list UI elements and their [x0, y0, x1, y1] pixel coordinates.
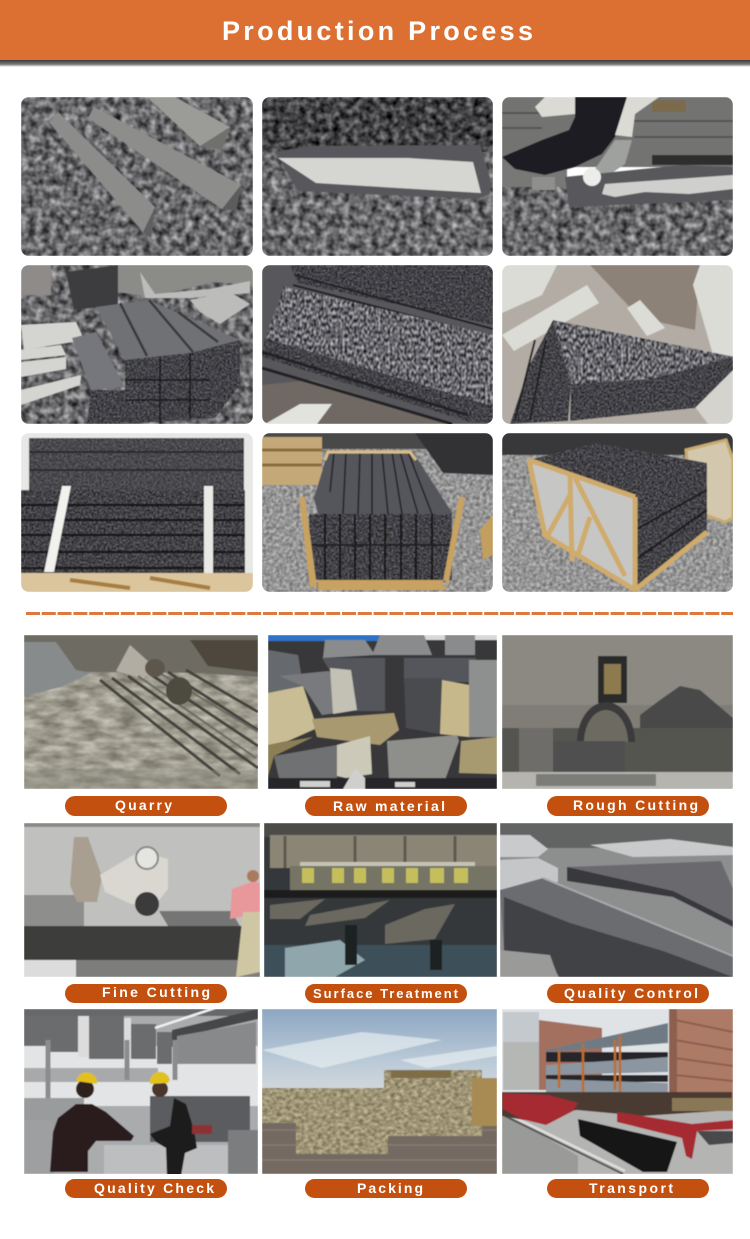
- photo: quality control slabs: [500, 823, 733, 977]
- pill: quarry: [65, 796, 227, 816]
- pill: quality control: Quality Control: [564, 985, 698, 1001]
- photo: worker flaming a kerbstone: [502, 97, 733, 256]
- photo: rough cutting saw: [502, 635, 733, 789]
- pill: transport: Transport: [589, 1180, 673, 1196]
- panel: process steps grid: [24, 635, 733, 1198]
- photo: kerbstones packed in crate, top view: [21, 433, 253, 592]
- pill: raw material: Raw material: [333, 798, 445, 814]
- photo: rail transport of slabs: [502, 1009, 733, 1174]
- title: Production Process: [222, 16, 533, 46]
- photo: kerbstone with flamed surface: [262, 97, 493, 256]
- photo: raw material blocks: [268, 635, 497, 789]
- pill: fine cutting: Fine Cutting: [102, 984, 210, 1000]
- photo: single block with pecked face: [502, 265, 735, 424]
- header banner: [0, 0, 750, 67]
- dashed divider: [26, 612, 733, 615]
- photo: packed crates under sky: [262, 1009, 497, 1174]
- pill: packing: Packing: [357, 1180, 423, 1196]
- photo: front of packed crate: [262, 433, 493, 592]
- photo: surface treatment line: [264, 823, 497, 977]
- pill: fine cutting: [65, 984, 227, 1003]
- pill: packing: [305, 1179, 467, 1198]
- photo: quarry: [24, 635, 258, 789]
- pill: transport: [547, 1179, 709, 1198]
- pill: quality check: Quality Check: [94, 1180, 214, 1196]
- photo: quality check workers: [24, 1003, 258, 1176]
- pill: quality check: [65, 1179, 227, 1198]
- photo: fine cutting machine: [24, 823, 260, 977]
- pill: surface treatment: Surface Treatment: [313, 986, 459, 1001]
- pill: rough cutting: Rough Cutting: [573, 797, 698, 813]
- pill: raw material: [305, 796, 467, 816]
- panel: upper photo grid: [21, 97, 735, 592]
- photo: sawn kerbstones on slate chips: [21, 97, 253, 256]
- photo: stacked flamed kerbstones in rubble: [21, 265, 253, 424]
- photo: crate with diagonal battens: [502, 433, 733, 592]
- photo: kerbstone stack with pecked top: [262, 265, 493, 424]
- pill: rough cutting: [547, 796, 709, 816]
- pill: quality control: [547, 984, 709, 1003]
- pill: quarry: Quarry: [115, 797, 172, 813]
